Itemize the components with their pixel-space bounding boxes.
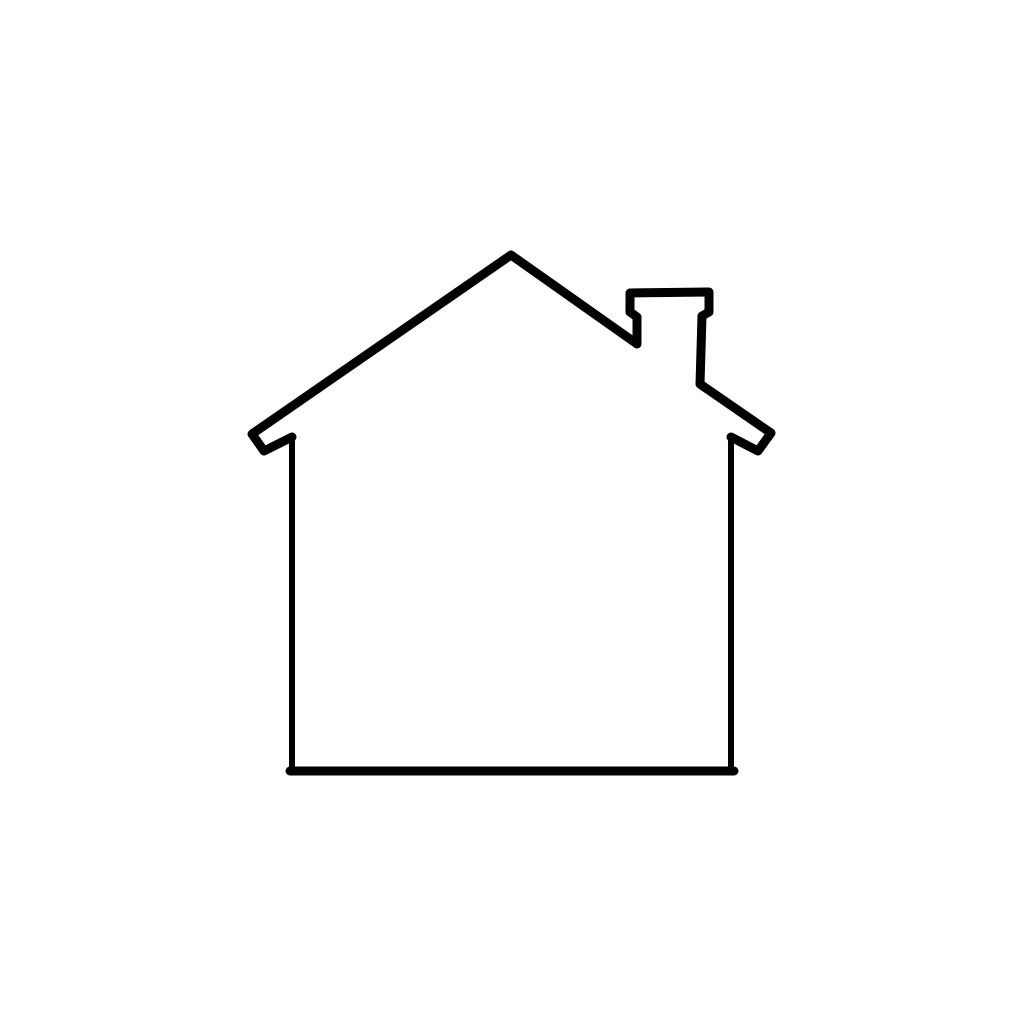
- house outline path: [252, 255, 771, 771]
